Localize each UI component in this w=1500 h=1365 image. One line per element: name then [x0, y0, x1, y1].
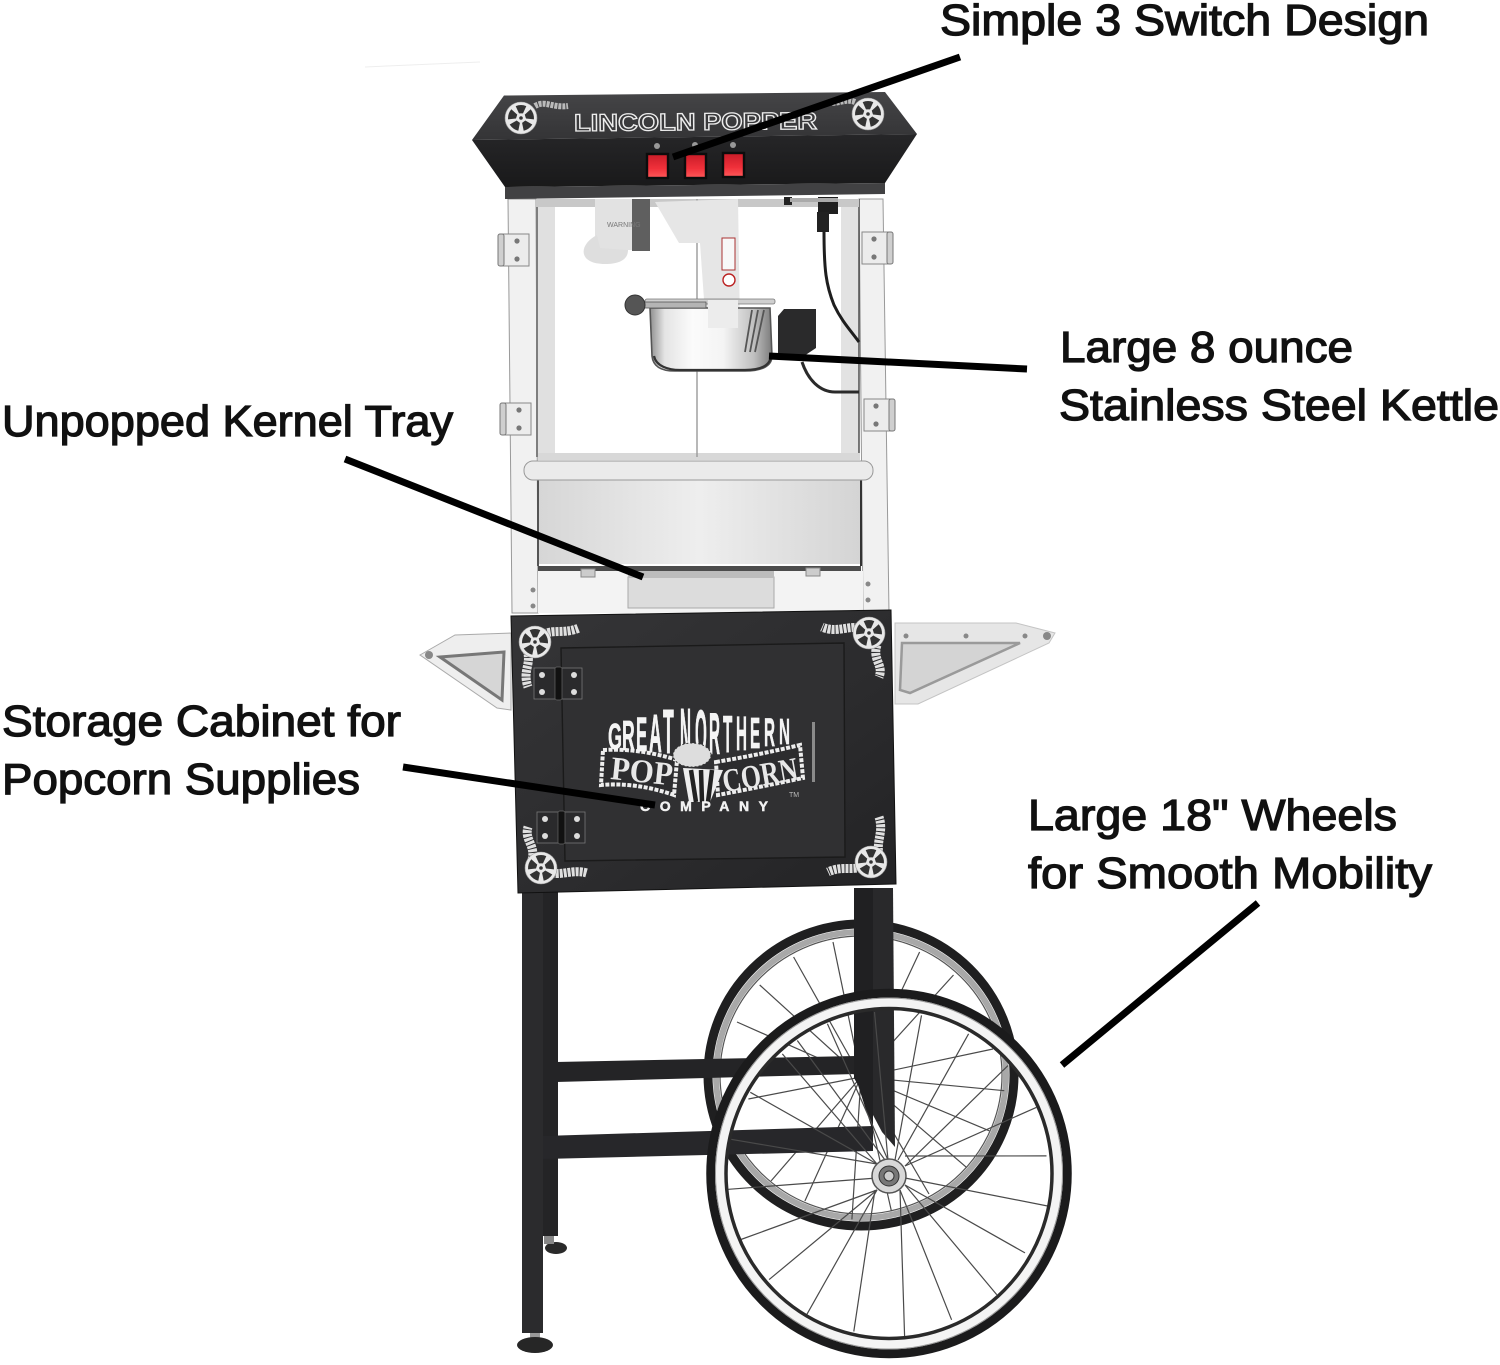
- centre kettle support column: [655, 199, 740, 328]
- great northern lettering: R: [764, 712, 775, 755]
- warning dispenser bracket: WARNING: [607, 222, 641, 229]
- lower cross bar: [543, 1126, 873, 1159]
- left side shelf: [420, 633, 511, 710]
- door handle: [812, 722, 815, 782]
- front left leg with foot: [517, 888, 553, 1353]
- right side post: [859, 199, 889, 613]
- great northern lettering: T: [723, 706, 732, 764]
- warning dispenser bracket: [584, 199, 650, 264]
- storage cabinet: [511, 610, 896, 893]
- door hinges: [498, 232, 895, 435]
- roof top slope: [472, 92, 917, 140]
- callout: 3 switch design: [673, 0, 1429, 157]
- callout text: [1059, 323, 1499, 430]
- stainless steel kettle: [625, 295, 816, 371]
- roof film reels: [505, 98, 884, 134]
- callout leader line: [1062, 903, 1258, 1065]
- callout leader line: [345, 459, 643, 577]
- great northern popcorn logo: [601, 693, 803, 814]
- great northern lettering: H: [736, 707, 747, 761]
- great northern lettering: R: [709, 702, 720, 766]
- wheel hub: [872, 1159, 906, 1193]
- callout text: Unpopped Kernel Tray: [2, 397, 453, 446]
- power cord and plug: [784, 197, 859, 392]
- pop corn lettering: [609, 751, 801, 800]
- great northern lettering: A: [649, 704, 662, 764]
- cart legs and cross bars: [517, 888, 895, 1353]
- faint scan line: [365, 62, 480, 67]
- glass window frame strips: [536, 199, 860, 460]
- cabinet hinges: [534, 667, 585, 844]
- left side post: [508, 199, 538, 613]
- callout text: Large 8 ounce: [1060, 323, 1353, 372]
- roof: [472, 92, 917, 199]
- rear left leg with foot: [542, 888, 567, 1254]
- callout leader line: [673, 57, 960, 157]
- cabinet door: [561, 643, 845, 861]
- great northern lettering: N: [680, 693, 691, 772]
- kettle knob: [625, 295, 645, 315]
- rear right leg: [854, 888, 873, 1132]
- callout: storage cabinet: [2, 697, 655, 805]
- great northern lettering: T: [663, 697, 674, 767]
- three rocker switches: [647, 142, 744, 178]
- unpopped kernel tray: [628, 571, 774, 608]
- callout text: Storage Cabinet for: [2, 697, 401, 746]
- callout: kettle: [769, 323, 1499, 430]
- callout: kernel tray: [2, 397, 643, 577]
- kettle motor: [778, 309, 816, 356]
- roof nameplate: LINCOLN POPPER: [574, 108, 817, 137]
- great northern lettering: O: [695, 697, 707, 769]
- popcorn chute panel: [524, 461, 873, 566]
- company lettering: COMPANY: [640, 798, 769, 814]
- front wheel: [711, 994, 1067, 1354]
- popcorn box: [673, 743, 723, 802]
- back wheel: [708, 924, 1014, 1226]
- pop corn lettering: CORN: [720, 752, 801, 800]
- callout text: Stainless Steel Kettle: [1059, 381, 1499, 430]
- great northern lettering: E: [636, 707, 647, 762]
- corner film reels: [519, 617, 887, 884]
- logo ribbons: [601, 745, 803, 795]
- callout leader line: [769, 356, 1027, 369]
- front right leg: [873, 888, 895, 1147]
- callout text: Popcorn Supplies: [2, 755, 360, 804]
- callout leader line: [403, 767, 655, 805]
- upper cross bar: [556, 1056, 856, 1082]
- great northern lettering: N: [779, 711, 790, 752]
- great northern lettering: E: [750, 708, 760, 757]
- callout text: for Smooth Mobility: [1028, 849, 1432, 898]
- pop corn lettering: POP: [609, 751, 674, 793]
- great northern lettering: [608, 693, 790, 772]
- callout: wheels: [1028, 791, 1432, 1065]
- great northern lettering: R: [622, 712, 635, 759]
- popcorn machine upper housing: [472, 92, 917, 613]
- lower ledge: [530, 566, 870, 613]
- roof base band: [505, 183, 885, 199]
- callout text: Large 18" Wheels: [1028, 791, 1397, 840]
- callout text: [2, 697, 401, 804]
- callout text: [1028, 791, 1432, 898]
- right side shelf: [895, 623, 1055, 704]
- great northern lettering: G: [608, 717, 622, 758]
- roof front slope: [472, 134, 917, 187]
- trademark: TM: [789, 792, 799, 799]
